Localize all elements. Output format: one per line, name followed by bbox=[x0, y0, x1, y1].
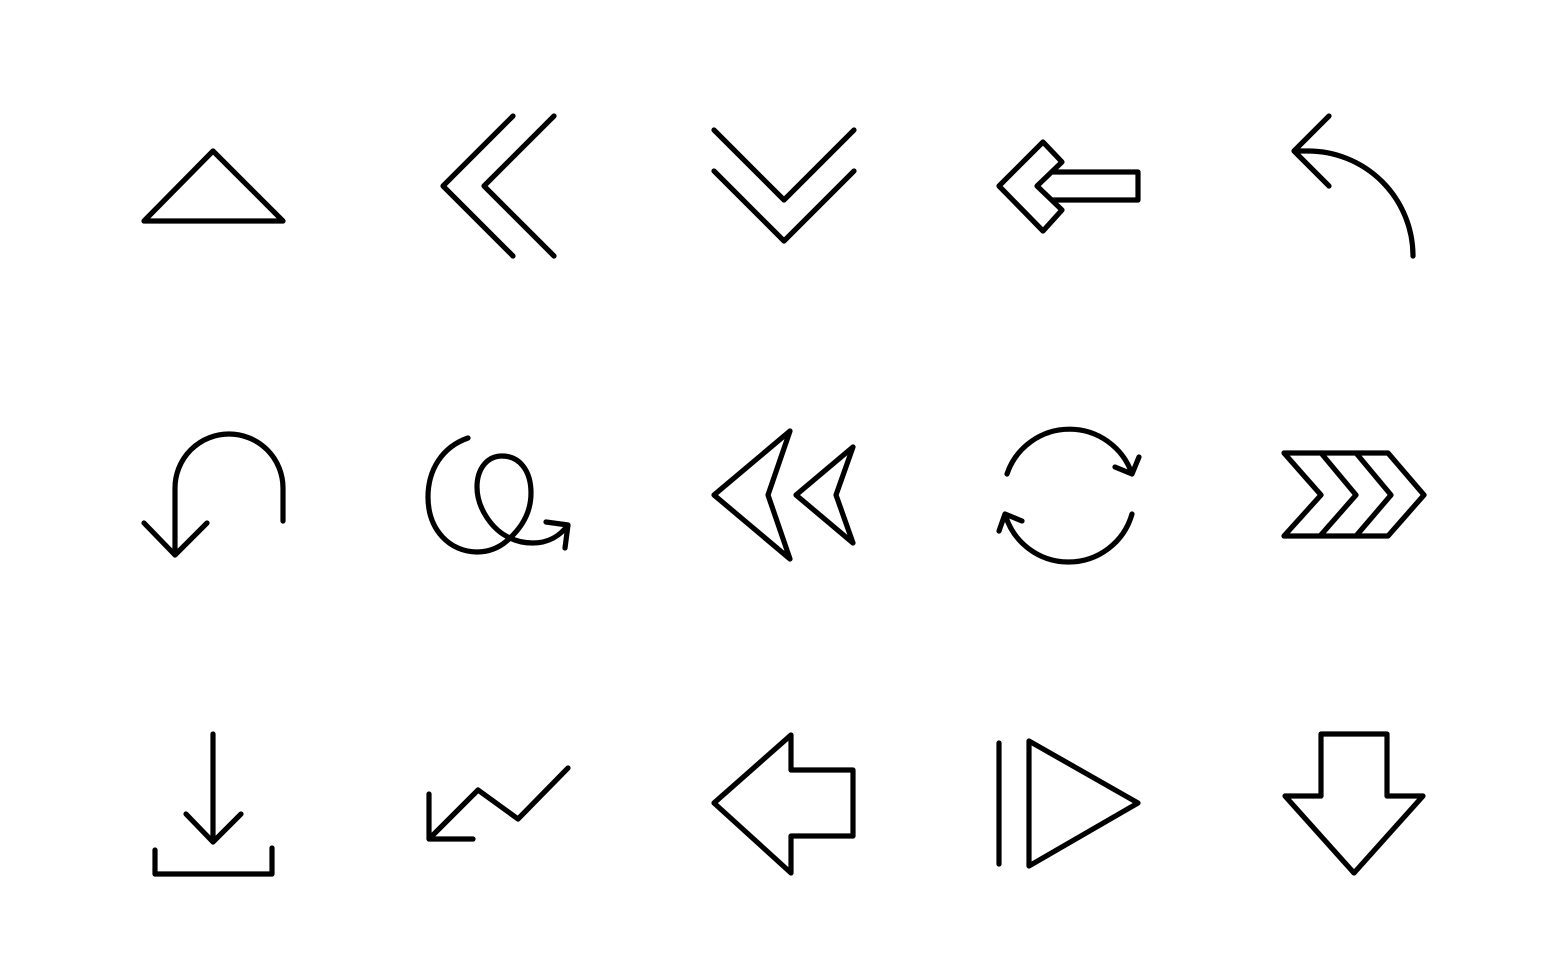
icon: download tray bbox=[155, 734, 272, 874]
icon: double triangle rewind bbox=[714, 431, 853, 559]
icon: u-turn arrow down bbox=[144, 434, 283, 555]
icon: notched arrow left bbox=[714, 735, 853, 873]
icon: curved arrow up-left bbox=[1294, 116, 1413, 256]
icon: bar and play triangle bbox=[999, 741, 1138, 866]
icon: double chevron left bbox=[443, 116, 554, 256]
icon: double chevron down bbox=[714, 130, 854, 241]
icon: looping arrow bbox=[428, 438, 568, 552]
icon: triple chevron right bbox=[1284, 453, 1424, 536]
icon: block arrow down bbox=[1285, 734, 1423, 873]
icon: refresh arrows bbox=[999, 429, 1139, 562]
icon: block arrow left bbox=[999, 142, 1138, 231]
icon: triangle up bbox=[144, 151, 283, 221]
icon: zigzag arrow down-left bbox=[429, 768, 568, 839]
